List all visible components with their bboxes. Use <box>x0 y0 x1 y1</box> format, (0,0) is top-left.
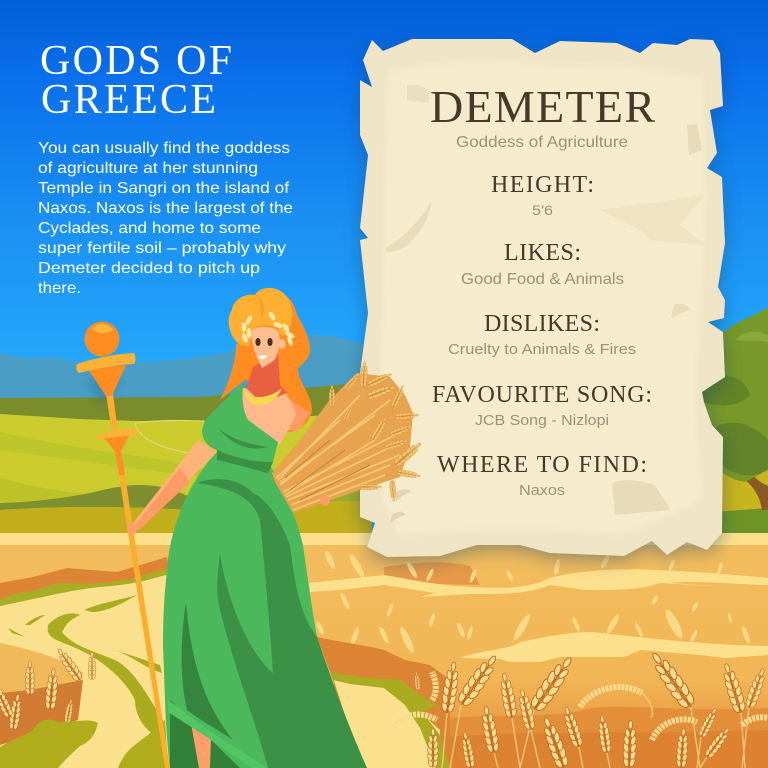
fact: favourite song <box>432 382 652 429</box>
left arm <box>130 440 217 530</box>
wheat field ground <box>0 533 768 768</box>
fact: likes <box>461 240 624 288</box>
left lower wheat ears <box>0 646 96 731</box>
intro text: Cyclades, and home to some <box>38 220 261 237</box>
field: falling grains <box>315 550 751 654</box>
fact: favourite song: JCB Song - Nizlopi <box>475 412 609 429</box>
parchment scroll <box>360 39 725 562</box>
foreground wheat <box>394 648 768 768</box>
title: GREECE <box>41 77 216 123</box>
scroll heading: Demeter: DEMETER <box>430 81 655 132</box>
background: blue hills <box>0 335 372 400</box>
face <box>251 327 280 368</box>
title <box>40 38 232 123</box>
field: cream stripes by the dress <box>309 575 384 592</box>
background: sky <box>0 0 768 400</box>
fact: where to find <box>437 452 647 499</box>
laurel <box>241 310 296 346</box>
intro text <box>38 140 293 297</box>
fact: likes: LIKES: <box>504 240 581 266</box>
left lower field: ridge, path and wheat <box>0 557 180 768</box>
intro text: of agriculture at her stunning <box>38 160 258 177</box>
intro text: super fertile soil – probably why <box>38 240 286 257</box>
fact: height: HEIGHT: <box>491 172 594 198</box>
dress lower <box>163 452 367 768</box>
figure: Demeter <box>127 288 367 768</box>
fact: dislikes <box>448 311 636 358</box>
fact: where to find: Naxos <box>519 482 565 499</box>
fact: likes: Good Food & Animals <box>461 271 624 288</box>
right lower field: ridge, cream land <box>317 637 450 768</box>
intro text: You can usually find the goddess <box>38 140 290 157</box>
intro text: Temple in Sangri on the island of <box>38 180 290 197</box>
neck <box>246 352 287 403</box>
intro text: there. <box>38 280 81 297</box>
leg <box>190 718 211 768</box>
dress sash <box>168 700 267 768</box>
hair front <box>229 288 292 346</box>
right arm <box>272 395 310 432</box>
background: green fields <box>0 382 372 538</box>
wheat sheaf <box>272 361 424 513</box>
fact: where to find: WHERE TO FIND: <box>437 452 647 478</box>
fact: height: 5'6 <box>532 202 553 218</box>
fact: favourite song: FAVOURITE SONG: <box>432 382 652 408</box>
intro text: Demeter decided to pitch up <box>38 260 260 277</box>
fact: dislikes: DISLIKES: <box>484 311 600 337</box>
necklace <box>243 388 282 405</box>
hand <box>127 523 137 535</box>
dress shadow right <box>197 479 367 768</box>
hair back <box>220 298 312 432</box>
tree on the right <box>700 308 768 535</box>
hand on sheaf <box>320 494 330 506</box>
scroll heading: Demeter: Goddess of Agriculture <box>456 134 628 151</box>
dress upper drape <box>202 382 278 462</box>
fact: height <box>491 172 594 218</box>
fact: dislikes: Cruelty to Animals & Fires <box>448 341 636 358</box>
dress shadow left <box>182 602 233 740</box>
staff <box>76 322 170 768</box>
title: GODS OF <box>40 38 232 84</box>
intro text: Naxos. Naxos is the largest of the <box>38 200 293 217</box>
chest <box>241 388 296 445</box>
